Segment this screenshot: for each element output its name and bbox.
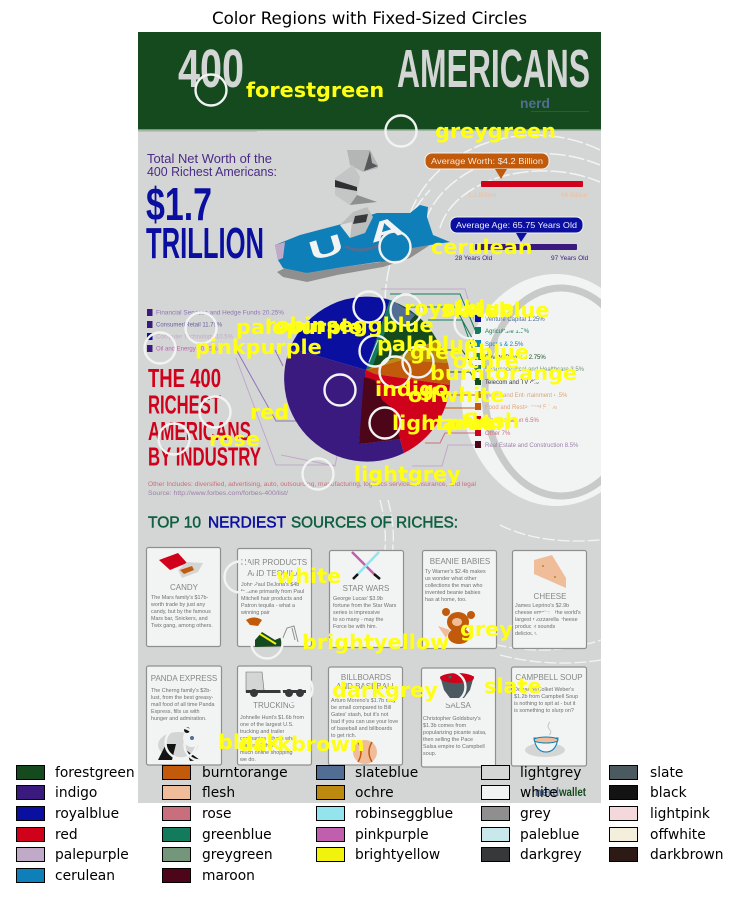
card: star wars: George Lucas' $3.9b	[333, 596, 383, 602]
legend: royalblue	[55, 806, 119, 822]
logo: nerdwallet	[536, 787, 586, 796]
card: beanie babies: us wonder what other	[425, 576, 477, 582]
card: hair products: HAIR PRODUCTS	[241, 558, 307, 567]
logo: nerdwallet: nerd	[535, 785, 559, 799]
icon: USA map	[275, 205, 450, 282]
heading: top 10 nerdiest: NERDIEST	[208, 514, 287, 532]
card: trucking	[238, 666, 312, 765]
yellow region labels: flesh	[463, 409, 520, 433]
panel: green header	[138, 32, 601, 132]
pie legend: right: Agriculture 1.5%	[485, 329, 530, 335]
yellow region labels: cerulean	[431, 235, 533, 259]
heading: the 400 richest americans by industry	[148, 368, 261, 466]
legend: lightpink	[650, 806, 710, 822]
yellow region labels: forestgreen	[246, 78, 384, 102]
pie legend: right: Transportation 6.5%	[485, 418, 539, 424]
legend: ochre	[355, 785, 394, 801]
card: beanie babies: Ty Warner's $2.4b makes	[425, 569, 486, 575]
callout: average age: 28 Years Old	[455, 255, 493, 262]
logo: nerd	[520, 98, 589, 112]
pie legend: right: Media and Entertainment 4.5%	[485, 393, 568, 399]
text: total net worth: Total Net Worth of the	[147, 152, 272, 166]
yellow region labels: maroon	[421, 411, 510, 435]
card: trucking: much online shopping	[240, 750, 292, 756]
card: salsa: Salsa empire to Campbell	[423, 744, 485, 750]
card: star wars	[330, 550, 404, 648]
heading: top 10 nerdiest	[148, 516, 457, 528]
card: candy: worth trade by just any	[150, 602, 206, 608]
card: panda express: Express, fills us with	[151, 709, 200, 715]
wedge: forest green	[366, 301, 437, 370]
card: billboards: AND BASEBALL	[336, 682, 397, 691]
text: other includes and source: Other Includes: diversified, advertising, auto, outsourcing, manufacturing, logistics services, insurance, and legal	[148, 481, 476, 488]
card: hair products: Mitchell hair products and	[241, 596, 302, 602]
card: salsa: popularizing picante salsa,	[423, 730, 487, 736]
heading: top 10 nerdiest: TOP 10	[148, 514, 201, 532]
pie legend: left: Oil and Energy 10.25%	[156, 346, 218, 352]
yellow region labels: slateblue	[441, 298, 550, 322]
card: campbell soup: $1.2b from Campbell Soup	[514, 694, 578, 700]
callout: average age: Average Age: 65.75 Years Old	[456, 220, 577, 230]
card: trucking: trucking and trailer	[240, 729, 285, 735]
callout: average worth	[425, 153, 588, 199]
card: billboards: Arturo Moreno's $1.7b may	[331, 698, 396, 704]
chart title: Color Regions with Fixed-Sized Circles	[212, 9, 527, 28]
pie legend: right: Other 7%	[485, 431, 511, 437]
text: total net worth: TRILLION	[146, 219, 264, 268]
legend: red	[55, 827, 78, 843]
card: panda express: lust, from the best greasy-	[151, 695, 214, 701]
legend: offwhite	[650, 827, 706, 843]
fixed-size sample circles	[144, 74, 572, 760]
pie legend: right: Private Buyouts 2.75%	[485, 355, 546, 361]
pie legend: right: Pharmaceutical and Healthcare 3.5%	[485, 367, 585, 373]
card: salsa: soup.	[423, 751, 436, 757]
text: other includes and source	[148, 481, 476, 497]
pie legend: right: Real Estate and Construction 8.5%	[485, 443, 579, 449]
card: candy: candy, but by the famous	[151, 609, 211, 615]
wedge: royal blue	[290, 297, 390, 370]
card: cheese: CHEESE	[534, 592, 566, 601]
legend: lightgrey	[520, 765, 581, 781]
legend: grey	[520, 806, 551, 822]
card: trucking: TRUCKING	[253, 701, 295, 710]
legend: burntorange	[202, 765, 288, 781]
card: hair products: fortune primarily from Paul	[241, 589, 304, 595]
legend: white	[520, 785, 558, 801]
yellow region labels: royalblue	[404, 296, 514, 320]
yellow region labels: lightpink	[392, 411, 498, 435]
card: candy: Twix gang, among others.	[151, 623, 213, 629]
card: beanie babies: BEANIE BABIES	[430, 557, 490, 566]
pie legend: left: Financial Services and Hedge Funds 20.25%	[156, 310, 285, 316]
heading: the 400 richest americans by industry: THE 400	[148, 363, 221, 393]
wedge: indigo	[284, 348, 404, 462]
legend: indigo	[55, 785, 97, 801]
pie legend: right	[475, 315, 585, 449]
text: total net worth	[146, 154, 276, 258]
pie legend: left	[147, 309, 285, 352]
legend: palepurple	[55, 847, 129, 863]
yellow region labels	[195, 78, 577, 756]
yellow region labels: white	[276, 564, 341, 588]
pie legend: right: Food and Restaurant 5.5%	[485, 405, 557, 411]
card: panda express: mall food of all time Panda	[151, 702, 215, 708]
card: candy: Mars bar, Snickers, and	[151, 616, 208, 622]
card: hair products: Patron tequila - what a	[241, 603, 295, 609]
wedge: burnt orange	[366, 360, 450, 385]
yellow region labels: indigo	[375, 377, 448, 401]
wedge: slate blue patch	[390, 302, 415, 327]
yellow region labels: burntorange	[430, 361, 577, 385]
card: campbell soup: is something to slurp on?	[514, 708, 574, 714]
pie legend: right: Telecom and TV 4%	[485, 380, 539, 386]
card: star wars: to so many - may the	[333, 617, 383, 623]
yellow region labels: ochre	[453, 349, 519, 373]
yellow region labels: red	[250, 400, 289, 424]
pie legend: left: Consumer/Retail 11.75%	[156, 322, 223, 328]
card: campbell soup	[512, 667, 586, 766]
callout: average worth: 66 Billion	[561, 192, 588, 199]
yellow region labels: slate	[484, 674, 542, 698]
legend: robinseggblue	[355, 806, 453, 822]
legend	[16, 765, 723, 884]
card: campbell soup: is nothing to spit at - but it	[514, 701, 576, 707]
legend: darkgrey	[520, 847, 582, 863]
card: cheese: James Leprino's $2.9b	[515, 603, 569, 609]
pie legend: right: Sports & 2.5%	[485, 342, 524, 348]
wedge: red	[359, 370, 450, 453]
pie legend: left: Computer Technology 10.5%	[156, 334, 234, 340]
yellow region labels: greenblue	[410, 340, 529, 364]
card: candy: The Mars family's $17b-	[151, 595, 209, 601]
pie legend: right: Venture Capital 1.25%	[485, 317, 545, 323]
posterized infographic image	[138, 32, 651, 803]
pie chart	[284, 297, 450, 462]
card: star wars: Force be with him.	[333, 624, 377, 630]
heading: 400: 400	[178, 39, 244, 99]
heading: top 10 nerdiest: SOURCES OF RICHES:	[291, 514, 458, 532]
logo: nerd: nerd	[520, 95, 550, 111]
yellow region labels: robinseggblue	[265, 313, 434, 337]
card: trucking: one of the largest U.S.	[240, 722, 294, 728]
card: billboards: of baseball and billboards	[331, 726, 392, 732]
yellow region labels: black	[218, 730, 281, 754]
card: salsa: then selling the Pace	[423, 737, 473, 743]
legend: slateblue	[355, 765, 418, 781]
yellow region labels: rose	[209, 427, 260, 451]
icon: USA map: U	[305, 229, 347, 267]
yellow region labels: pinkpurple	[195, 335, 322, 359]
card: cheese: largest mozzarella cheese	[515, 617, 578, 623]
legend: paleblue	[520, 827, 579, 843]
card: beanie babies: invented beanie babies	[425, 590, 481, 596]
card: trucking: makes all that	[240, 743, 274, 749]
card: candy	[146, 548, 220, 646]
text: total net worth: $1.7	[146, 178, 212, 230]
card: candy: CANDY	[170, 583, 199, 592]
card: salsa: $1.3b comes from	[423, 723, 467, 729]
card: trucking: companies - that's what	[240, 736, 297, 742]
card: salsa	[422, 668, 496, 767]
yellow region labels: brightyellow	[302, 630, 449, 654]
card: cheese: producer sounds	[515, 624, 555, 630]
legend: pinkpurple	[355, 827, 429, 843]
card: trucking: Johnelle Hunt's $1.6b from	[240, 715, 304, 721]
icon: USA map: A	[365, 211, 407, 249]
legend: brightyellow	[355, 847, 440, 863]
callout: average worth: 1.1 Billion	[468, 192, 497, 199]
connectors around pie	[236, 289, 476, 466]
yellow region labels: palepurple	[236, 315, 362, 339]
yellow region labels: greygreen	[435, 119, 556, 143]
card: star wars: STAR WARS	[343, 584, 389, 593]
card: panda express: hunger and admiration.	[151, 716, 206, 722]
legend: greenblue	[202, 827, 272, 843]
card: hair products: AND TEQUILA	[247, 569, 301, 578]
card: campbell soup: Dorrance/Colket Weber's	[514, 687, 574, 693]
wedge: maroon	[359, 377, 400, 444]
legend: greygreen	[202, 847, 273, 863]
heading: the 400 richest americans by industry: BY INDUSTRY	[148, 442, 261, 472]
logo: nerdwallet: wallet	[558, 785, 586, 799]
card: beanie babies: has at home, too.	[425, 597, 467, 603]
card: beanie babies: collections the man who	[425, 583, 483, 589]
legend: slate	[650, 765, 683, 781]
card: hair products	[238, 548, 312, 647]
card: billboards: BILLBOARDS	[341, 673, 391, 682]
legend: maroon	[202, 868, 255, 884]
icon: metallic dollar sign	[335, 150, 378, 238]
legend: forestgreen	[55, 765, 135, 781]
legend: darkbrown	[650, 847, 723, 863]
card: billboards: to get rich.	[331, 733, 356, 739]
card: panda express: PANDA EXPRESS	[151, 674, 217, 683]
legend: black	[650, 785, 687, 801]
yellow region labels: darkgrey	[332, 678, 438, 702]
callout: average age	[450, 217, 589, 262]
panel: background rings	[380, 134, 601, 664]
card: star wars: fortune from the Star Wars	[333, 603, 397, 609]
card: billboards: bad if you can use your love	[331, 719, 398, 725]
legend: cerulean	[55, 868, 115, 884]
legend: flesh	[202, 785, 235, 801]
card: hair products: John Paul DeJoria's $4b	[241, 582, 299, 588]
card: salsa: Christopher Goldsbury's	[423, 716, 481, 722]
yellow region labels: darkbrown	[238, 732, 364, 756]
card: panda express	[146, 666, 222, 765]
wedge: green blue	[366, 300, 394, 370]
callout: average age: 97 Years Old	[551, 255, 589, 262]
heading: the 400 richest americans by industry: AMERICANS	[148, 416, 251, 446]
text: total net worth: 400 Richest Americans:	[147, 165, 277, 179]
card: campbell soup: CAMPBELL SOUP	[515, 673, 583, 682]
yellow region labels: grey	[460, 617, 513, 641]
yellow region labels: paleblue	[377, 332, 478, 356]
card: billboards	[328, 667, 402, 765]
card: cheese: delicious.	[515, 631, 537, 637]
card: cheese: cheese empire - the world's	[515, 610, 581, 616]
text: other includes and source: Source: http://www.forbes.com/forbes-400/list/	[148, 490, 288, 497]
yellow region labels: offwhite	[408, 383, 504, 407]
yellow region labels: lightgrey	[354, 462, 461, 486]
card: salsa: SALSA	[445, 701, 472, 710]
card: star wars: series is impressive	[333, 610, 380, 616]
card: billboards: Gates' stash, but it's not	[331, 712, 389, 718]
card: billboards: be small compared to Bill	[331, 705, 391, 711]
card: trucking: we do.	[239, 757, 256, 763]
callout: average worth: Average Worth: $4.2 Billion	[431, 156, 543, 166]
card: cheese	[512, 550, 586, 648]
legend: rose	[202, 806, 232, 822]
card: hair products: winning pair	[240, 610, 270, 616]
heading: Americans: AMERICANS	[397, 39, 590, 99]
heading: the 400 richest americans by industry: RICHEST	[148, 390, 221, 420]
wedge: ochre	[366, 340, 448, 370]
card: beanie babies	[422, 550, 496, 648]
card: panda express: The Cherng family's $2b-	[151, 688, 211, 694]
